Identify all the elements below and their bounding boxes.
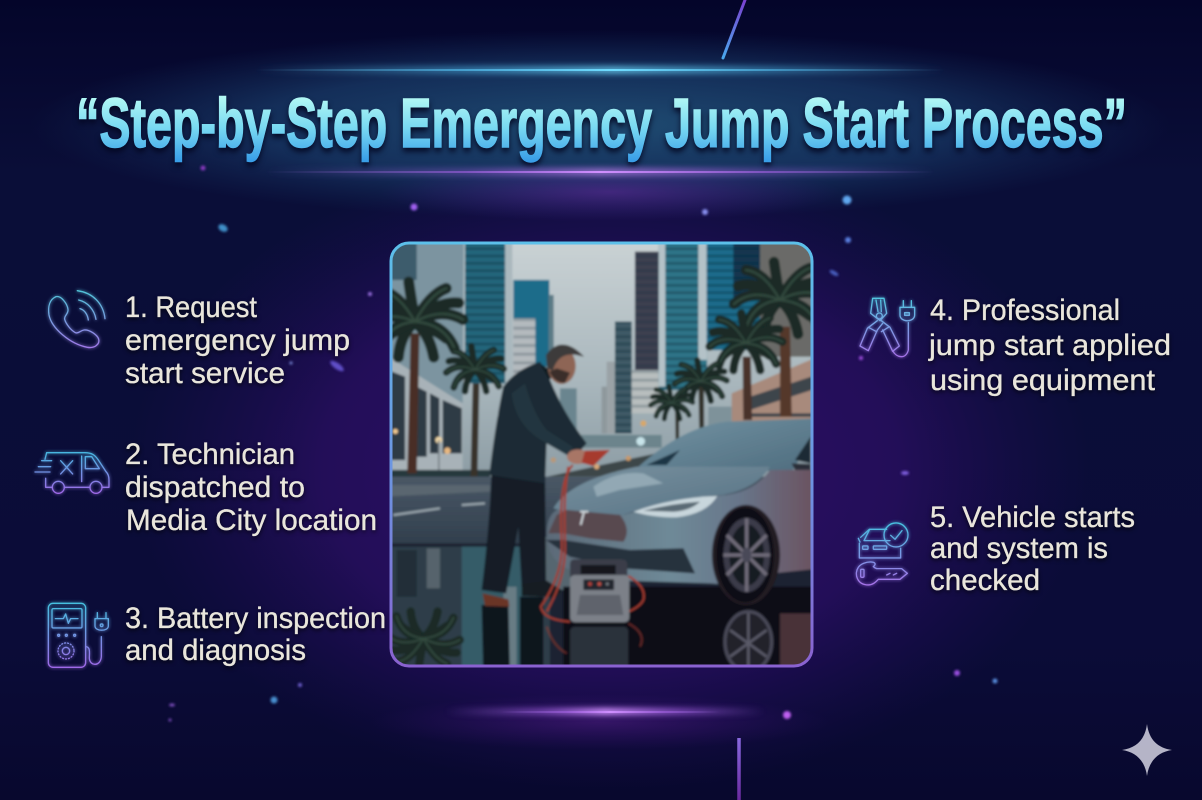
overpass	[578, 435, 662, 448]
step 4 text	[928, 294, 1171, 397]
step 5 text: checked	[930, 564, 1040, 597]
step 4 text: jump start applied	[928, 329, 1171, 362]
left building	[392, 244, 492, 478]
lower title neon line	[265, 168, 935, 176]
step 5 text: 5. Vehicle starts	[930, 501, 1135, 534]
step 3 text	[125, 602, 386, 667]
step 1 text: emergency jump	[125, 324, 350, 357]
step 3 text: 3. Battery inspection	[125, 602, 386, 635]
step 4 text: 4. Professional	[930, 294, 1120, 327]
car	[546, 418, 822, 677]
step 3 text: and diagnosis	[125, 634, 306, 667]
step 2 text: dispatched to	[125, 471, 305, 504]
step 1 text: 1. Request	[125, 291, 258, 324]
meteor streak bottom	[737, 738, 741, 800]
meteor streak top	[723, 0, 745, 58]
palm trees	[367, 262, 826, 477]
sky	[460, 244, 810, 478]
icon: dispatch van	[35, 453, 109, 493]
step 2 text	[125, 438, 377, 537]
step 2 text: Media City location	[126, 504, 377, 537]
step 5 text: and system is	[930, 532, 1108, 565]
top neon line	[255, 66, 945, 74]
right peach building	[708, 358, 810, 426]
jump cables	[541, 465, 644, 653]
step 1 text	[125, 291, 350, 390]
technician	[482, 345, 610, 677]
distant towers	[465, 233, 822, 435]
step 1 text: start service	[125, 357, 285, 390]
bottom neon line	[445, 708, 765, 715]
icon: sparkle watermark	[1122, 724, 1172, 776]
floating sparkles	[168, 166, 998, 722]
step 4 text: using equipment	[930, 364, 1156, 397]
icon: jumper clamp and plug	[860, 298, 915, 357]
portable jump starter	[570, 559, 629, 670]
step 5 text	[930, 501, 1135, 597]
panel: central photo of technician jump starting car	[367, 233, 826, 677]
road and wet ground	[383, 477, 822, 677]
step 2 text: 2. Technician	[125, 438, 295, 471]
icon: car check and key	[856, 523, 908, 585]
icon: phone with signal	[49, 291, 105, 348]
icon: battery tester	[48, 603, 108, 667]
